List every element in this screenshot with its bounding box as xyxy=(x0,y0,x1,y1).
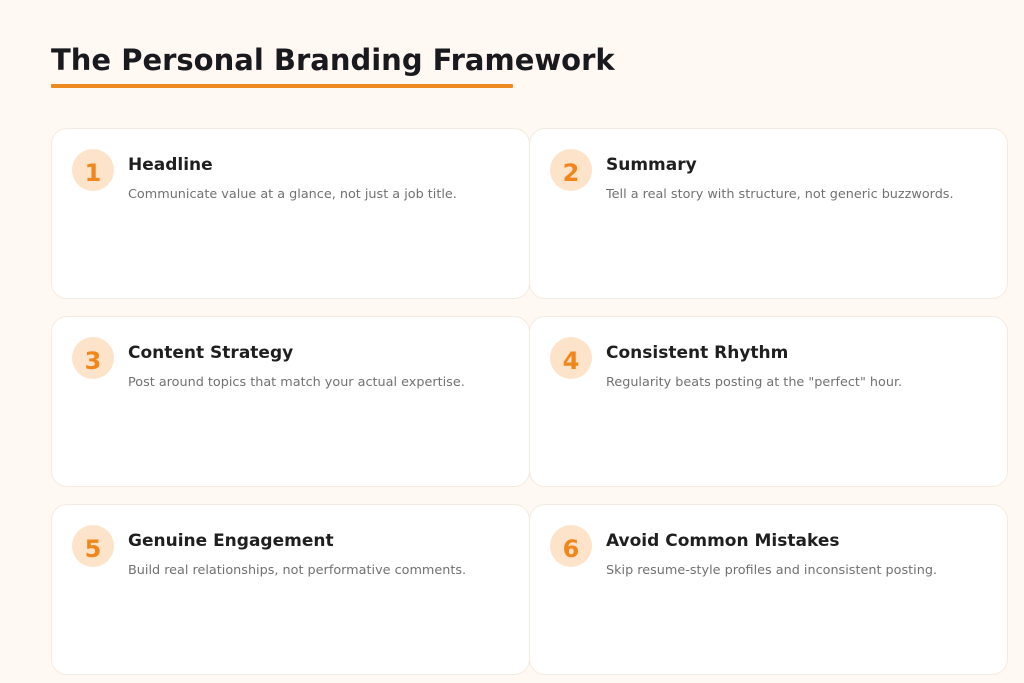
icon: number 4 badge: 4 xyxy=(563,347,579,375)
title underline xyxy=(51,84,513,88)
icon: number 2 badge: 2 xyxy=(563,159,579,187)
icon: number 4 badge xyxy=(550,337,592,379)
icon: number 5 badge xyxy=(72,525,114,567)
card text: Consistent Rhythm: Regularity beats posting at the "perfect" hour. xyxy=(606,375,902,390)
card heading: Content Strategy: Content Strategy xyxy=(128,343,293,363)
card heading: Genuine Engagement: Genuine Engagement xyxy=(128,531,334,551)
card heading: Consistent Rhythm: Consistent Rhythm xyxy=(606,343,788,363)
icon: number 3 badge: 3 xyxy=(85,347,101,375)
icon: number 6 badge xyxy=(550,525,592,567)
card text: Summary: Tell a real story with structure, not generic buzzwords. xyxy=(606,187,954,202)
card heading: Avoid Common Mistakes: Avoid Common Mistakes xyxy=(606,531,839,551)
card text: Genuine Engagement: Build real relationships, not performative comments. xyxy=(128,563,466,578)
card text: Headline: Communicate value at a glance, not just a job title. xyxy=(128,187,457,202)
panel: card 2 summary xyxy=(529,128,1008,299)
card text: Avoid Common Mistakes: Skip resume-style profiles and inconsistent posting. xyxy=(606,563,937,578)
panel: card 6 avoid common mistakes xyxy=(529,504,1008,675)
panel: card 3 content strategy xyxy=(51,316,530,487)
icon: number 2 badge xyxy=(550,149,592,191)
icon: number 1 badge: 1 xyxy=(85,159,101,187)
icon: number 6 badge: 6 xyxy=(563,535,579,563)
icon: number 1 badge xyxy=(72,149,114,191)
card heading: Summary: Summary xyxy=(606,155,697,175)
title: The Personal Branding Framework xyxy=(51,43,615,77)
panel: card 1 headline xyxy=(51,128,530,299)
icon: number 5 badge: 5 xyxy=(85,535,101,563)
icon: number 3 badge xyxy=(72,337,114,379)
panel: card 5 genuine engagement xyxy=(51,504,530,675)
card heading: Headline: Headline xyxy=(128,155,213,175)
card text: Content Strategy: Post around topics that match your actual expertise. xyxy=(128,375,465,390)
panel: card 4 consistent rhythm xyxy=(529,316,1008,487)
